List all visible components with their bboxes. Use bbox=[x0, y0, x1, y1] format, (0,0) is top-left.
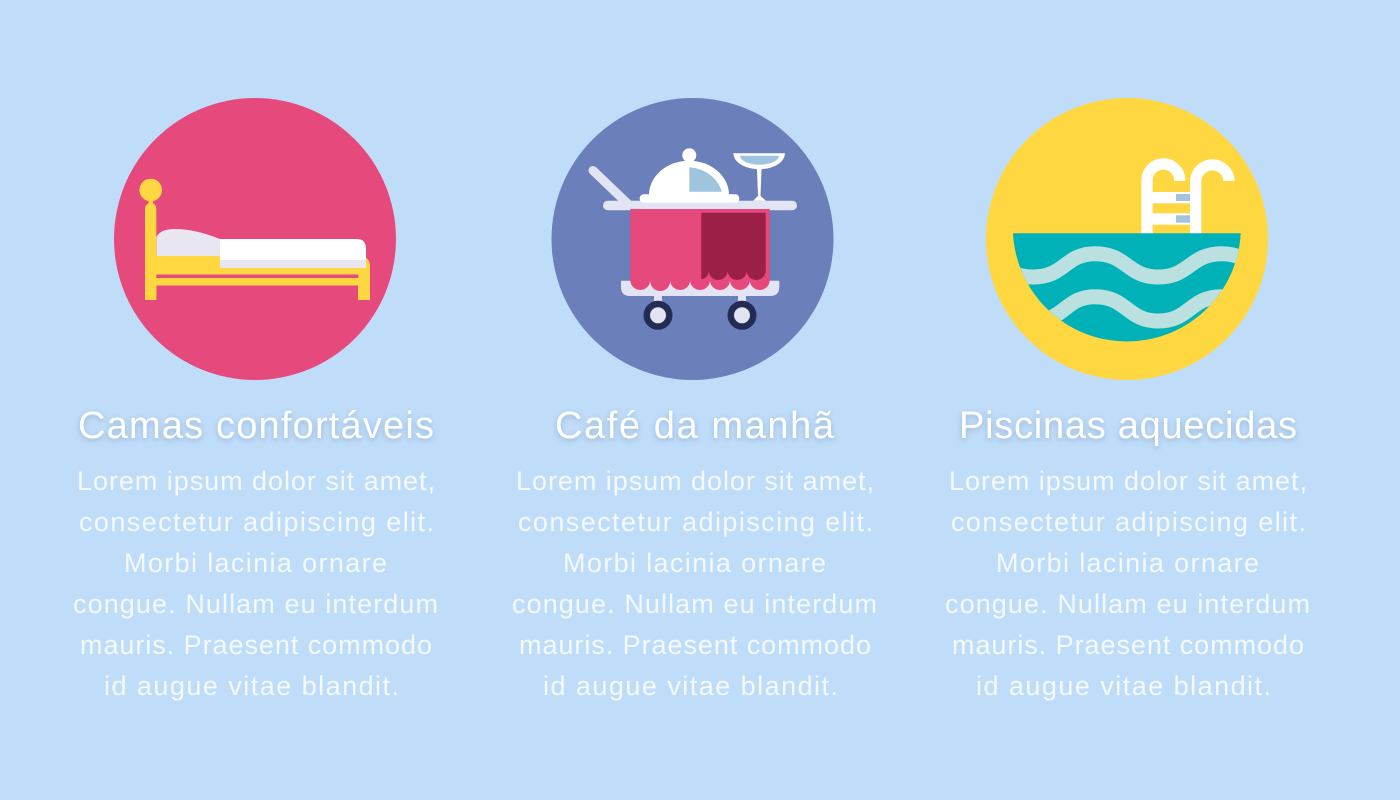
text block: piscinas description: Lorem ipsum dolor sit amet, bbox=[949, 466, 1307, 496]
text block: café description bbox=[512, 466, 877, 701]
text block: piscinas description: consectetur adipiscing elit. bbox=[951, 507, 1306, 537]
text block: camas description: Morbi lacinia ornare bbox=[124, 548, 387, 578]
panel: piscinas aquecidas bbox=[945, 98, 1310, 701]
text block: camas description bbox=[73, 466, 438, 701]
icon: breakfast trolley in blue circle bbox=[552, 98, 834, 380]
heading: camas: Camas confortáveis bbox=[78, 405, 434, 447]
text block: piscinas description: congue. Nullam eu interdum bbox=[945, 589, 1310, 619]
text block: café description: id augue vitae blandit. bbox=[543, 671, 838, 701]
text block: camas description: id augue vitae blandit. bbox=[104, 671, 399, 701]
text block: camas description: mauris. Praesent commodo bbox=[80, 630, 432, 660]
panel: café da manhã bbox=[512, 98, 877, 701]
text block: piscinas description: Morbi lacinia ornare bbox=[996, 548, 1259, 578]
heading: café: Café da manhã bbox=[555, 405, 835, 447]
text block: café description: Morbi lacinia ornare bbox=[563, 548, 826, 578]
heading: piscinas: Piscinas aquecidas bbox=[959, 405, 1297, 447]
text block: piscinas description: mauris. Praesent commodo bbox=[952, 630, 1304, 660]
text block: camas description: Lorem ipsum dolor sit amet, bbox=[77, 466, 435, 496]
text block: camas description: consectetur adipiscing elit. bbox=[79, 507, 434, 537]
text block: piscinas description: id augue vitae blandit. bbox=[976, 671, 1271, 701]
panel: camas confortáveis bbox=[73, 98, 438, 701]
text block: piscinas description bbox=[945, 466, 1310, 701]
icon: pool in yellow circle bbox=[986, 98, 1268, 380]
text block: café description: congue. Nullam eu interdum bbox=[512, 589, 877, 619]
text block: camas description: congue. Nullam eu interdum bbox=[73, 589, 438, 619]
icon: bed in pink circle bbox=[114, 98, 396, 380]
text block: café description: Lorem ipsum dolor sit amet, bbox=[516, 466, 874, 496]
text block: café description: mauris. Praesent commodo bbox=[519, 630, 871, 660]
text block: café description: consectetur adipiscing elit. bbox=[518, 507, 873, 537]
